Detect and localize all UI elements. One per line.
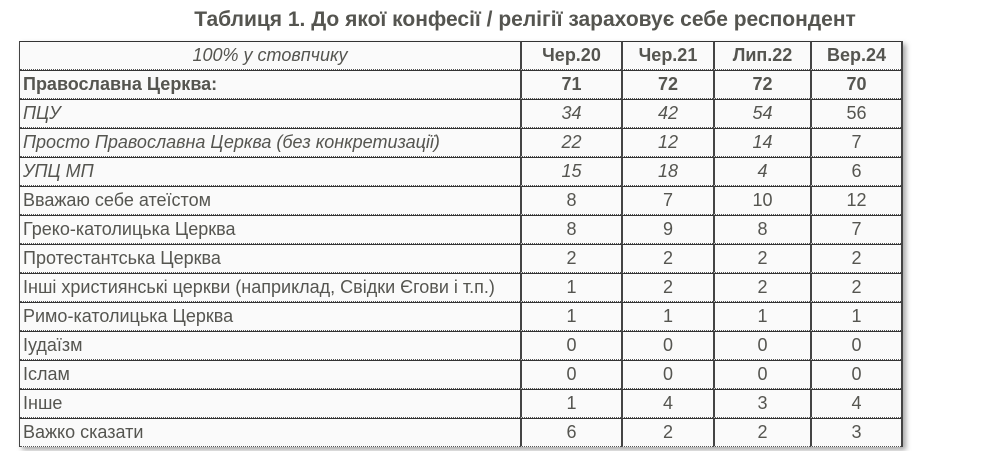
row: atheist [20,186,901,215]
row: hard to say: Важко сказати [23,422,143,442]
row: OCU: 54 [752,103,773,123]
row: Judaism: 0 [851,335,862,355]
row: OCU: 34 [561,103,582,123]
row: hard to say: 3 [851,422,862,442]
row: Judaism [20,331,901,360]
row: other: 4 [851,393,862,413]
row: Greek Catholic: 8 [566,219,576,239]
row: Protestant [20,244,901,273]
header row: 100% у стовпчику [193,45,347,65]
row: Greek Catholic: Греко-католицька Церква [23,219,236,239]
row: atheist: Вважаю себе атеїстом [23,190,211,210]
row: Judaism: Іудаїзм [23,335,83,355]
row: hard to say: 2 [757,422,768,442]
row: Islam: 0 [757,364,768,384]
row: UOC MP: 6 [851,161,862,181]
row: OCU: ПЦУ [23,103,61,123]
row: other: 1 [566,393,576,413]
row: simply Orthodox [20,128,901,157]
row: Protestant: 2 [757,248,768,268]
row: UOC MP [20,157,901,186]
row: Greek Catholic [20,215,901,244]
row: Judaism: 0 [663,335,673,355]
row: hard to say: 2 [663,422,673,442]
row: other Christian: 2 [663,277,673,297]
row: simply Orthodox: 14 [752,132,773,152]
row: OCU: 56 [846,103,867,123]
row: Protestant: 2 [566,248,576,268]
row: simply Orthodox: Просто Православна Церква (без конкретизації) [23,132,440,152]
row: atheist: 7 [663,190,673,210]
row: Islam [20,360,901,389]
row: atheist: 12 [846,190,867,210]
row: atheist: 8 [566,190,576,210]
row: UOC MP: УПЦ МП [23,161,94,181]
row: UOC MP: 4 [757,161,768,181]
row: other: Інше [23,393,62,413]
row: other: 3 [757,393,768,413]
row: other Christian: 1 [566,277,576,297]
row: Orthodox Church: Православна Церква: [23,74,217,94]
row: Orthodox Church: 72 [658,74,678,94]
header row [20,41,901,447]
row: OCU: 42 [658,103,678,123]
header row: Вер.24 [827,45,886,65]
row: Roman Catholic: 1 [851,306,862,326]
row: Islam: Іслам [23,364,70,384]
row: hard to say [20,418,901,447]
row: other Christian: 2 [757,277,768,297]
row: UOC MP: 15 [561,161,582,181]
title: Таблиця 1. До якої конфесії / релігії зараховує себе респондент [194,8,856,31]
row: hard to say: 6 [566,422,576,442]
row: other Christian: Інші християнські церкви (наприклад, Свідки Єгови і т.п.) [23,277,495,297]
row: simply Orthodox: 7 [851,132,862,152]
row: Greek Catholic: 7 [851,219,862,239]
row: Roman Catholic [20,302,901,331]
row: other [20,389,901,418]
row: Greek Catholic: 8 [757,219,768,239]
row: Orthodox Church: 71 [561,74,582,94]
row: Roman Catholic: Римо-католицька Церква [23,306,233,326]
row: Roman Catholic: 1 [566,306,576,326]
row: simply Orthodox: 12 [658,132,678,152]
row: simply Orthodox: 22 [561,132,582,152]
row: Roman Catholic: 1 [663,306,673,326]
row: other Christian: 2 [851,277,862,297]
row: Islam: 0 [663,364,673,384]
row: OCU [20,99,901,128]
row: UOC MP: 18 [658,161,678,181]
row: other Christian [20,273,901,302]
row: Protestant: 2 [851,248,862,268]
row: Orthodox Church [20,70,901,99]
row: Roman Catholic: 1 [757,306,768,326]
row: Orthodox Church: 70 [846,74,867,94]
row: Judaism: 0 [757,335,768,355]
row: Islam: 0 [851,364,862,384]
row: Islam: 0 [566,364,576,384]
row: Orthodox Church: 72 [752,74,773,94]
row: Protestant: 2 [663,248,673,268]
header row: Лип.22 [733,45,792,65]
row: Greek Catholic: 9 [663,219,673,239]
row: atheist: 10 [752,190,773,210]
header row: Чер.20 [542,45,601,65]
header row: Чер.21 [639,45,697,65]
row: Protestant: Протестантська Церква [23,248,221,268]
row: Judaism: 0 [566,335,576,355]
row: other: 4 [663,393,673,413]
